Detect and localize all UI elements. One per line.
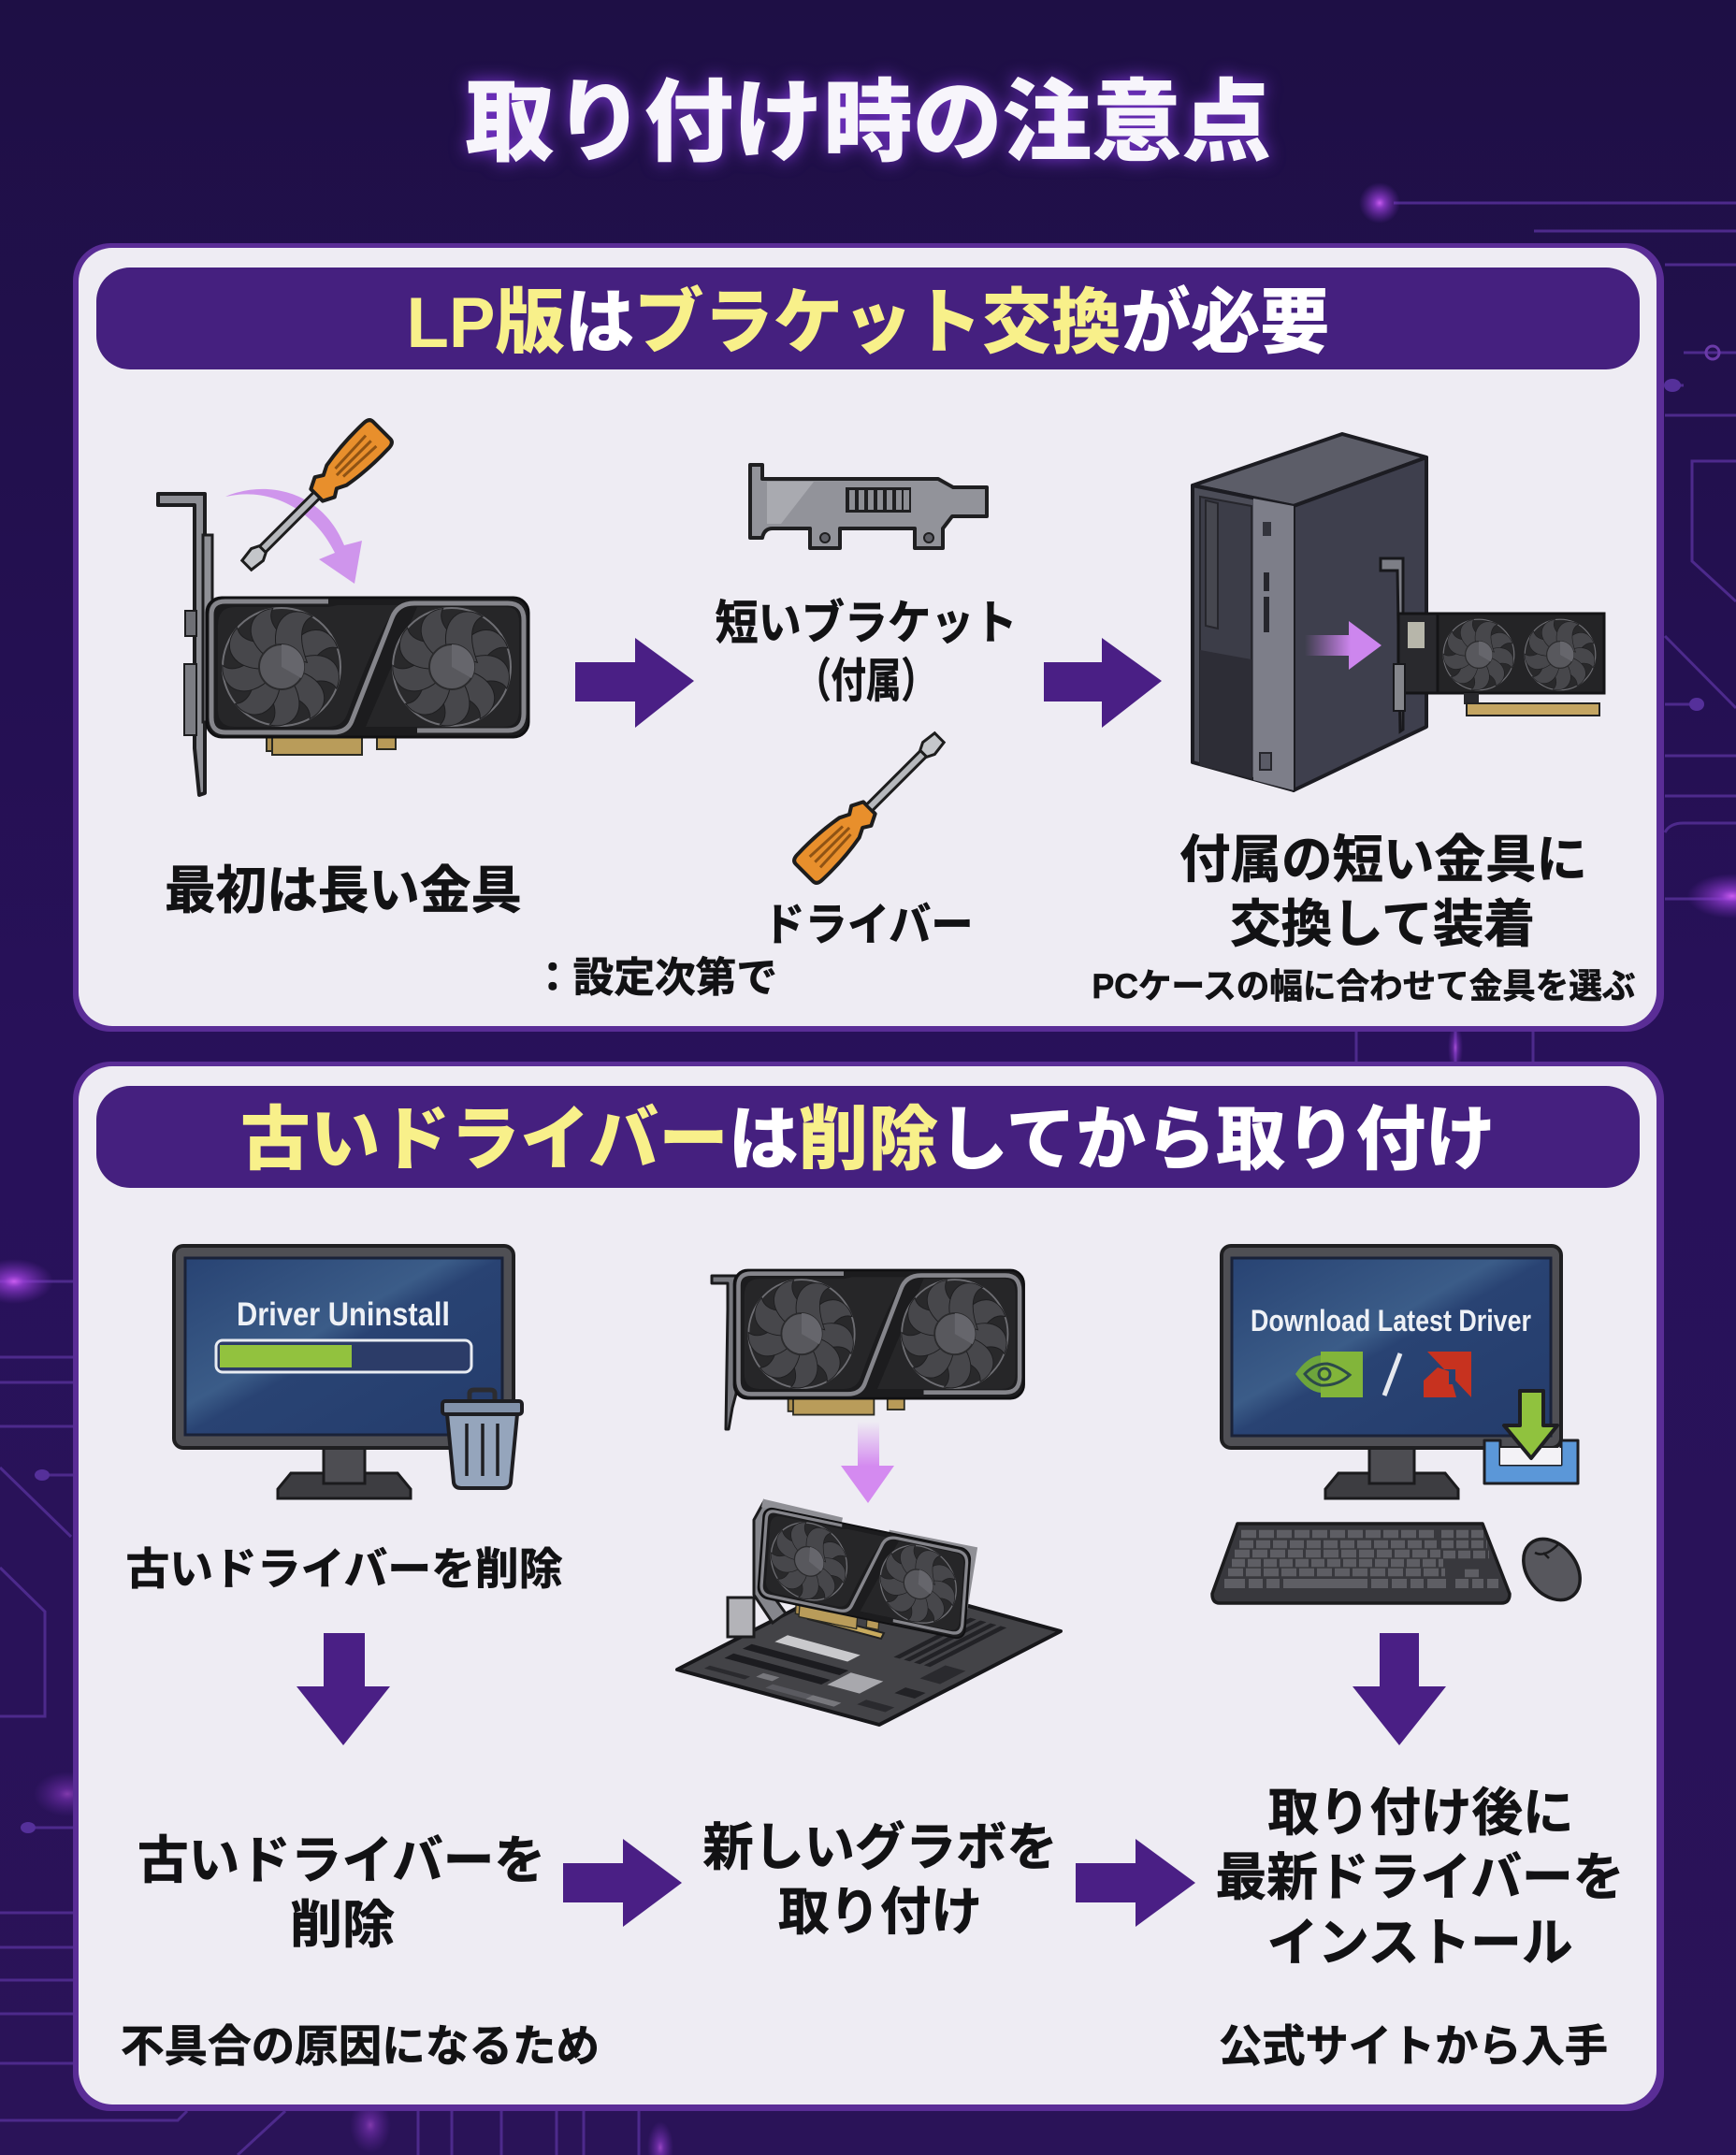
label: swap to short bracket: 付属の短い金具に: [1179, 831, 1587, 889]
icon: keyboard: [1212, 1524, 1510, 1603]
heading bar: bracket: LP版はブラケット交換が必要: [406, 283, 1330, 363]
label: swap to short bracket: 交換して装着: [1230, 895, 1535, 953]
heading bar: bracket: [96, 268, 1640, 369]
heading bar: driver: 古いドライバーは削除してから取り付け: [240, 1100, 1496, 1179]
icon: PC case with low profile card: [1193, 434, 1604, 790]
label: short bracket included: （付属）: [796, 655, 936, 707]
title: 取り付け時の注意点: [465, 73, 1271, 173]
label: install latest driver: [1216, 1784, 1624, 1972]
arrow: step 2 to 3: [1044, 638, 1162, 728]
note: depending on settings: ：設定次第で: [532, 955, 777, 1001]
arrow: step 1 to 2: [575, 638, 694, 728]
heading bar: driver: [96, 1086, 1640, 1188]
panel: LP bracket replacement: [73, 243, 1664, 1032]
label: remove old driver: 古いドライバーを削除: [125, 1544, 563, 1594]
panel: driver removal: [73, 1062, 1664, 2111]
label: install new card: 取り付け: [778, 1883, 982, 1941]
icon: orange screwdriver: [791, 725, 952, 886]
label: swap to short bracket: [1179, 831, 1587, 953]
icon: download tray and arrow: [1484, 1391, 1578, 1483]
label: first long bracket: 最初は長い金具: [165, 861, 522, 919]
label: install new card: [703, 1818, 1057, 1941]
icon: monitor download latest driver: Download Latest Driver: [1251, 1304, 1531, 1338]
label: driver tool: ドライバー: [763, 901, 973, 950]
icon: graphics card with long bracket: [158, 494, 528, 795]
icon: graphics card top: [712, 1270, 1024, 1429]
note: from official site: 公式サイトから入手: [1219, 2021, 1608, 2071]
icon: red logo: [1424, 1352, 1471, 1397]
icon: screwdriver on card: [234, 417, 395, 578]
arrow: pink install: [841, 1422, 894, 1503]
icon: motherboard with graphics card: [677, 1501, 1061, 1725]
arrow: down left: [297, 1633, 390, 1745]
label: install latest driver: 取り付け後に: [1268, 1784, 1573, 1842]
icon: monitor driver uninstall: [174, 1246, 514, 1498]
arrow: down right: [1353, 1633, 1446, 1745]
label: short bracket included: 短いブラケット: [715, 597, 1018, 649]
icon: short bracket: [750, 465, 987, 548]
slash divider: [1384, 1353, 1400, 1396]
label: install latest driver: 最新ドライバーを: [1216, 1848, 1624, 1906]
label: remove old driver step: 古いドライバーを: [137, 1831, 545, 1889]
icon: monitor download latest driver: [1222, 1246, 1561, 1498]
icon: monitor driver uninstall: Driver Uninstall: [237, 1296, 450, 1333]
note: cause of problems: 不具合の原因になるため: [121, 2021, 600, 2071]
label: remove old driver step: 削除: [290, 1896, 395, 1954]
icon: mouse: [1512, 1528, 1592, 1611]
note: choose bracket for case: PCケースの幅に合わせて金具を選ぶ: [1092, 967, 1635, 1005]
label: install latest driver: インストール: [1266, 1914, 1573, 1972]
arrow: step 1 to 2 driver: [563, 1839, 682, 1927]
arrow: step 2 to 3 driver: [1076, 1839, 1195, 1927]
icon: trash can: [442, 1390, 522, 1488]
icon: green logo: [1295, 1352, 1363, 1397]
label: install new card: 新しいグラボを: [703, 1818, 1057, 1876]
icon: curved purple arrow: [225, 489, 362, 584]
label: remove old driver step: [137, 1831, 545, 1954]
label: short bracket included: [715, 597, 1018, 707]
